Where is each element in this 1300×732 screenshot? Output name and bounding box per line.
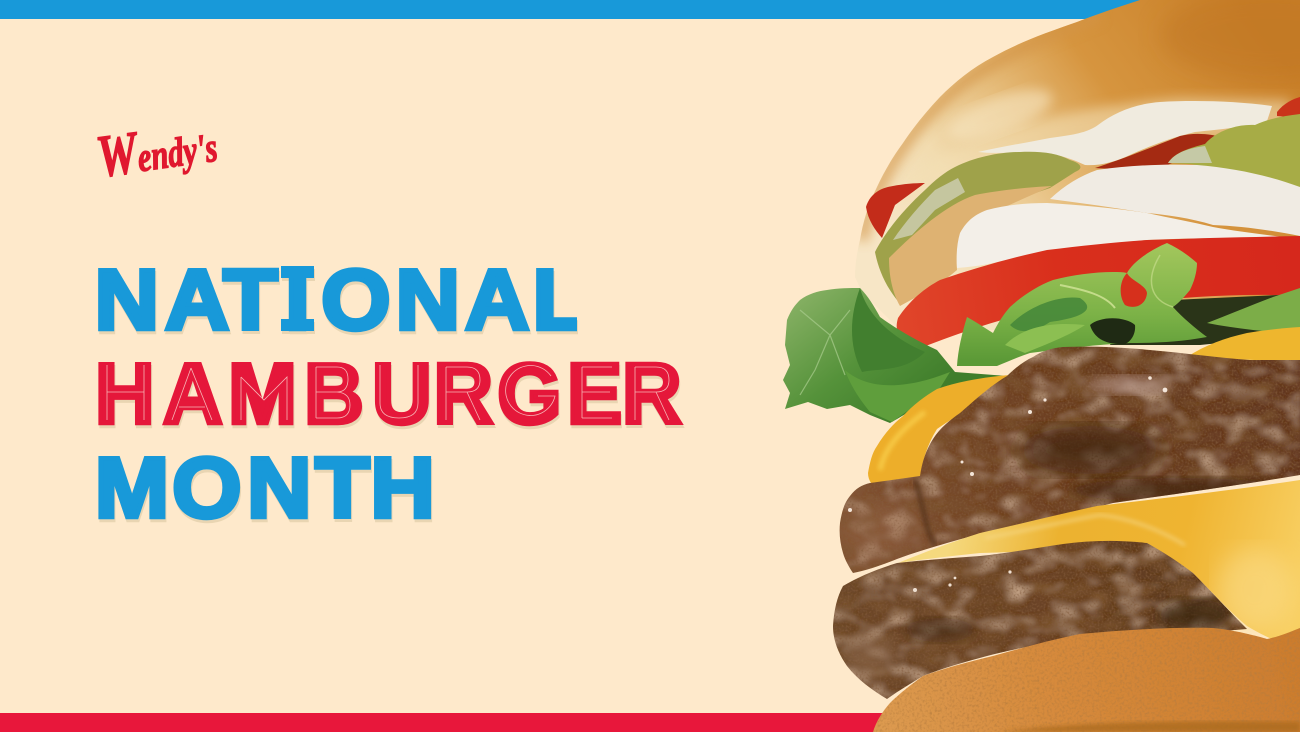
dark sauce under mayo: [1095, 134, 1225, 169]
ketchup top right: [1277, 97, 1300, 118]
top right cheese edge: [1187, 327, 1300, 362]
bottom beef patty: [833, 540, 1247, 699]
bottom bun: [873, 628, 1300, 732]
bottom red bar: [0, 713, 885, 732]
left melted cheese: [868, 375, 1010, 491]
right lettuce: [1207, 288, 1300, 335]
lower onion ring: [957, 203, 1284, 268]
top blue bar: [0, 0, 1145, 19]
left lettuce leaf: [783, 288, 1007, 423]
title line: HAMBURGER: HAMBURGER: [95, 346, 682, 441]
upper onion ring: [1050, 165, 1300, 236]
top bun: [855, 0, 1300, 330]
tomato slice: [897, 236, 1300, 347]
title: [94, 253, 682, 536]
title line: NATIONAL: NATIONAL: [95, 253, 587, 348]
mayo: [978, 101, 1272, 165]
title line: MONTH: MONTH: [95, 441, 435, 536]
lower melted cheese slice: [898, 480, 1300, 642]
dark gap under tomato: [1110, 294, 1280, 345]
ketchup left: [866, 183, 925, 238]
pickle slice left: [875, 152, 1080, 306]
center lettuce: [957, 243, 1207, 366]
burger photo illustration: [783, 0, 1300, 732]
Wendy's logo: Wendy's: [93, 108, 221, 190]
pickle slice right: [1168, 114, 1300, 188]
top beef patty: [830, 340, 1300, 580]
